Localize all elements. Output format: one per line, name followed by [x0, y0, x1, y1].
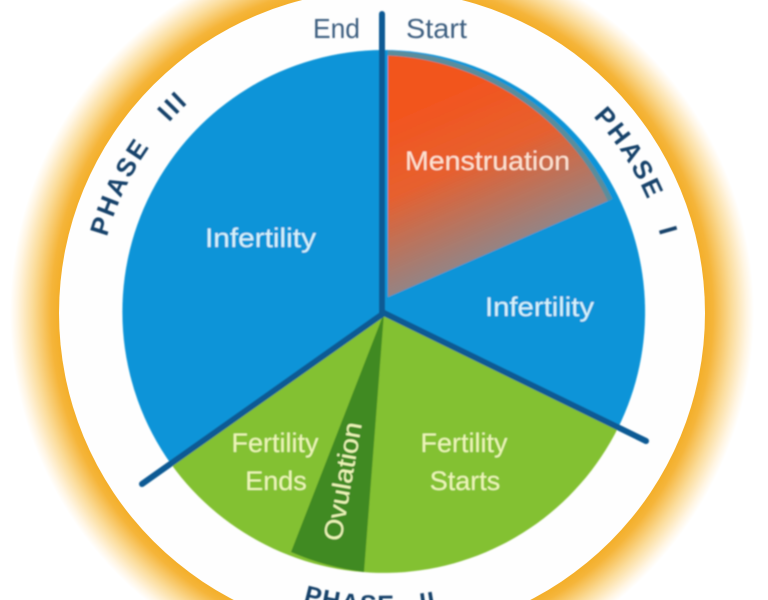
label: PHASE I: PHASE I — [594, 105, 678, 236]
label: Start: Start — [406, 13, 467, 44]
segment: menstruation — [388, 52, 610, 297]
menstruation arc edge — [388, 53, 610, 200]
label: Menstruation: Menstruation — [405, 146, 570, 176]
label: Infertility phase I: Infertility — [485, 292, 595, 322]
segment: phase III infertility — [122, 50, 384, 464]
segment: fertility — [171, 313, 618, 573]
pie chart — [89, 10, 678, 600]
label: Fertility Starts: Starts — [430, 466, 500, 496]
label: End: End — [313, 13, 360, 44]
label: Infertility phase III: Infertility — [205, 223, 317, 253]
label: Ovulation: Ovulation — [317, 420, 368, 543]
segment: phase I infertility — [384, 50, 645, 428]
label: Fertility Starts: Fertility — [420, 428, 508, 458]
phase divider lines — [142, 14, 646, 484]
label: Fertility Ends: Fertility — [232, 428, 319, 458]
segment: ovulation — [291, 313, 384, 572]
label: Fertility Ends: Ends — [245, 466, 307, 496]
label: PHASE III: PHASE III — [89, 90, 187, 236]
